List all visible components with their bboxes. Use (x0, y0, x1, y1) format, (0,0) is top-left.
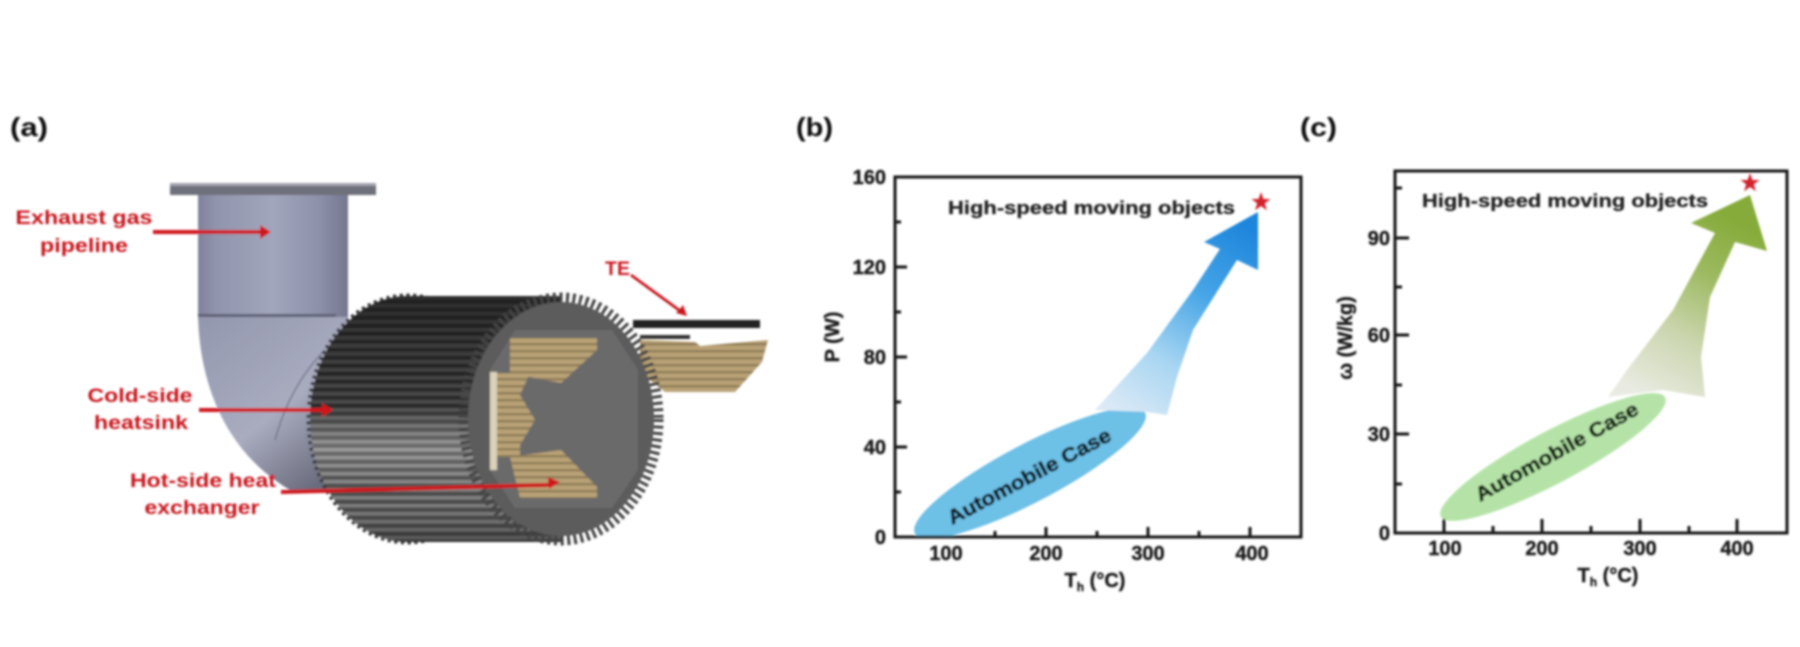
x axis title: T (1065, 570, 1077, 592)
x axis tick labels: 400 (1720, 538, 1754, 560)
x axis tick labels: 300 (1131, 543, 1165, 565)
arrow: exhaust gas pipeline (153, 225, 271, 239)
y axis tick labels: 90 (1368, 228, 1390, 250)
x axis title: (°C) (1597, 565, 1638, 587)
red star (1252, 192, 1270, 210)
y axis tick labels: 30 (1368, 424, 1390, 446)
x axis tick labels: 200 (1525, 538, 1559, 560)
y axis tick labels: 40 (864, 437, 886, 459)
label: hot-side heat exchanger (130, 471, 277, 519)
arrow: cold-side heatsink (199, 403, 333, 417)
automobile case ellipse (912, 409, 1148, 538)
y axis tick labels: 60 (1368, 325, 1390, 347)
y axis tick labels (1368, 228, 1390, 545)
x axis tick labels: 100 (1428, 538, 1462, 560)
label: exhaust gas pipeline: Exhaust gas (16, 208, 152, 229)
label: exhaust gas pipeline (16, 208, 152, 257)
cold-side heatsink cylinder (310, 296, 658, 542)
red star (1740, 173, 1760, 191)
x axis title: (°C) (1084, 570, 1125, 592)
TE modules at right (633, 320, 768, 392)
y axis tick labels (853, 167, 886, 549)
panel label c: (c) (1300, 112, 1337, 142)
panel a: thermoelectric generator model (10, 112, 768, 542)
y axis tick labels: 0 (875, 527, 886, 549)
arrow: TE (630, 274, 687, 316)
panel c: power density chart (1300, 112, 1787, 589)
x axis tick labels: 400 (1235, 543, 1269, 565)
label: hot-side heat exchanger: exchanger (144, 498, 260, 519)
panel label a: (a) (10, 112, 48, 142)
arrow: hot-side heat exchanger (281, 477, 560, 494)
panel b: power chart (796, 112, 1301, 594)
annotation: automobile case: Automobile Case (1472, 398, 1642, 506)
label: hot-side heat exchanger: Hot-side heat (130, 471, 277, 492)
exhaust gas pipe (170, 183, 420, 490)
x axis title: h (1590, 575, 1597, 589)
axes frame and ticks (895, 177, 1301, 537)
axes frame and ticks (1395, 171, 1787, 533)
trend arrow (1608, 195, 1767, 397)
y axis title: ω (W/kg) (1335, 296, 1357, 380)
automobile case ellipse (1429, 374, 1677, 540)
x axis title: h (1077, 580, 1084, 594)
x axis title: T (1578, 565, 1590, 587)
annotation: high-speed moving objects: High-speed moving objects (948, 198, 1235, 218)
label: cold-side heatsink: Cold-side (88, 386, 192, 407)
heat exchanger opening (490, 330, 638, 508)
y axis title: P (W) (822, 312, 844, 362)
x axis tick labels: 300 (1623, 538, 1657, 560)
x axis tick labels: 200 (1029, 543, 1063, 565)
y axis tick labels: 120 (853, 257, 886, 279)
label: exhaust gas pipeline: pipeline (40, 236, 128, 257)
annotation: automobile case: Automobile Case (944, 425, 1115, 529)
y axis tick labels: 160 (853, 167, 886, 189)
label: cold-side heatsink (88, 386, 192, 434)
x axis tick labels (929, 543, 1269, 565)
y axis tick labels: 80 (864, 347, 886, 369)
annotation: high-speed moving objects: High-speed moving objects (1422, 191, 1708, 211)
trend arrow (1095, 212, 1258, 415)
label: cold-side heatsink: heatsink (94, 413, 189, 434)
x axis tick labels: 100 (929, 543, 963, 565)
y axis tick labels: 0 (1379, 523, 1390, 545)
infographic figure (10, 115, 1790, 593)
x axis tick labels (1428, 538, 1754, 560)
panel label b: (b) (796, 112, 833, 142)
label: TE: TE (605, 259, 630, 280)
